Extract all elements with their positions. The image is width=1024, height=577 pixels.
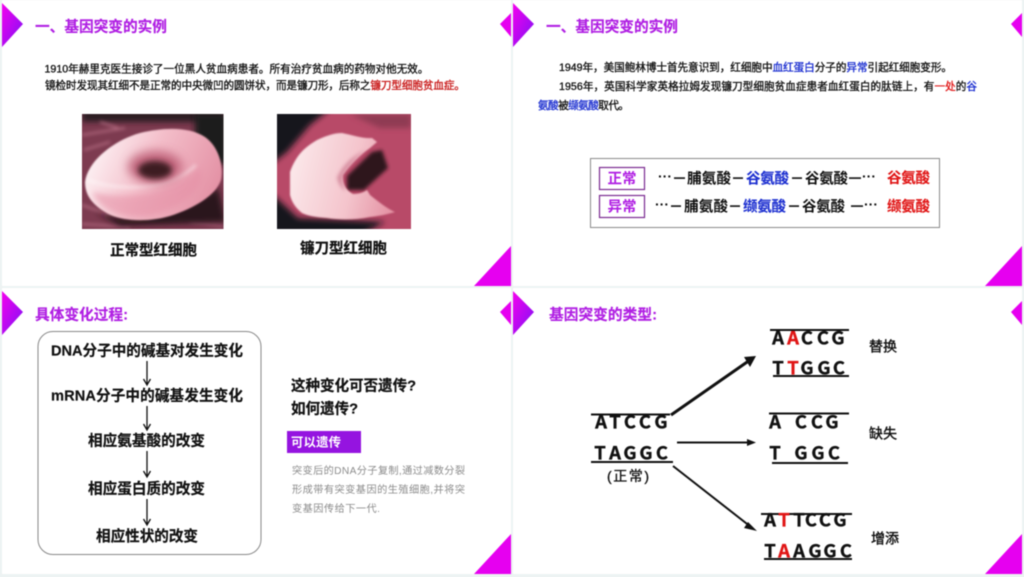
label: deletion: 缺失 xyxy=(869,425,897,441)
DNA: normal: A xyxy=(594,408,607,434)
arrow: to substitution xyxy=(671,356,756,415)
title: 一、基因突变的实例 xyxy=(546,18,678,36)
sequence: normal peptide: ··· xyxy=(862,168,876,184)
DNA: normal: G xyxy=(639,440,653,466)
DNA: normal: C xyxy=(639,408,651,434)
DNA: substitution: C xyxy=(817,324,829,350)
panel: slide 4, mutation types xyxy=(513,288,1022,574)
DNA: insertion: G xyxy=(833,506,847,532)
DNA: insertion: C xyxy=(805,506,817,532)
icon: right diamond half xyxy=(500,13,511,37)
text block: history: 1956年，英国科学家英格拉姆发现镰刀型细胞贫血症患者血红蛋白的肽链上，有一处的谷 xyxy=(559,80,977,93)
DNA: insertion: A xyxy=(792,538,805,564)
question text: 如何遗传? xyxy=(291,400,358,418)
panel: slide 2, molecular cause xyxy=(513,0,1022,286)
question text: 这种变化可否遗传? xyxy=(291,376,416,394)
text block: case description xyxy=(44,62,465,92)
step 4: 相应蛋白质的改变 xyxy=(88,480,205,498)
icon: right diamond half xyxy=(1011,301,1022,325)
DNA: insertion: G xyxy=(808,538,822,564)
label: sickle cell: 镰刀型红细胞 xyxy=(300,239,387,257)
sequence: abnormal peptide: 缬氨酸 xyxy=(743,198,786,216)
icon: corner triangle xyxy=(474,534,511,574)
sequence: normal peptide xyxy=(658,168,930,188)
DNA: substitution: A xyxy=(771,324,784,350)
label: normal cell: 正常型红细胞 xyxy=(110,241,197,259)
label box: normal: 正常 xyxy=(608,170,636,188)
DNA: deletion: A xyxy=(768,408,781,434)
text block: case description: 1910年赫里克医生接诊了一位黑人贫血病患者。所有治疗贫血病的药物对他无效。 xyxy=(44,62,428,76)
DNA: normal: T xyxy=(609,408,621,434)
arrow xyxy=(144,451,150,477)
arrow: to deletion xyxy=(677,439,756,446)
text block: explanation xyxy=(292,464,465,515)
answer tag: 可以遗传 xyxy=(291,435,341,450)
arrow xyxy=(144,499,150,525)
sequence: abnormal peptide: ··· xyxy=(655,196,669,212)
text block: explanation: 突变后的DNA分子复制,通过减数分裂 xyxy=(292,464,465,477)
arrow xyxy=(144,361,150,385)
sequence: normal peptide: 谷氨酸 xyxy=(887,169,930,187)
DNA: insertion: T xyxy=(764,538,776,564)
icon: left triangle xyxy=(513,3,534,47)
text block: history xyxy=(538,61,977,112)
DNA: deletion: T xyxy=(769,440,781,466)
label box: abnormal xyxy=(600,196,644,218)
icon: left triangle xyxy=(513,291,534,335)
DNA: insertion: C xyxy=(840,538,852,564)
DNA: deletion xyxy=(768,408,849,466)
DNA: normal: G xyxy=(623,440,637,466)
text block: explanation: 形成带有突变基因的生殖细胞,并将突 xyxy=(292,483,465,496)
DNA: substitution xyxy=(770,324,849,380)
DNA: insertion: T xyxy=(793,506,805,532)
DNA: deletion: C xyxy=(811,408,823,434)
DNA: substitution: G xyxy=(831,324,845,350)
label: substitution: 替换 xyxy=(869,338,897,354)
DNA: insertion: A xyxy=(763,506,776,532)
DNA: normal xyxy=(591,408,673,484)
step 5: 相应性状的改变 xyxy=(96,527,198,545)
sequence: abnormal peptide: 缬氨酸 xyxy=(887,198,930,216)
label: insertion: 增添 xyxy=(871,530,899,546)
DNA: deletion: C xyxy=(795,408,807,434)
icon: corner triangle xyxy=(985,246,1022,286)
text block: case description: 镜检时发现其红细不是正常的中央微凹的圆饼状，而是镰刀形，后称之镰刀型细胞贫血症。 xyxy=(45,79,465,92)
DNA: insertion: G xyxy=(823,538,837,564)
DNA: substitution: G xyxy=(817,354,831,380)
icon: left triangle xyxy=(2,3,23,47)
sequence: abnormal peptide: 脯氨酸 xyxy=(684,198,728,216)
icon: corner triangle xyxy=(985,534,1022,574)
title: 一、基因突变的实例 xyxy=(35,18,167,36)
arrow: to insertion xyxy=(673,466,757,531)
step 3: 相应氨基酸的改变 xyxy=(88,432,205,450)
sequence: abnormal peptide: ··· xyxy=(864,196,878,212)
sequence: abnormal peptide: 谷氨酸 xyxy=(802,198,846,216)
panel: slide 1, sickle cell example xyxy=(2,0,511,286)
DNA: normal: A xyxy=(608,440,621,466)
icon: corner triangle xyxy=(474,246,511,286)
DNA: substitution: G xyxy=(800,354,814,380)
DNA: substitution: T xyxy=(787,354,799,380)
DNA: deletion: G xyxy=(794,440,808,466)
DNA: deletion: C xyxy=(828,440,840,466)
text block: explanation: 变基因传给下一代. xyxy=(292,502,380,515)
DNA: insertion: T xyxy=(778,506,790,532)
DNA: substitution: A xyxy=(786,324,799,350)
sequence: normal peptide: 脯氨酸 xyxy=(687,170,732,188)
sequence: abnormal peptide xyxy=(655,196,930,216)
panel: slide 3, change process xyxy=(2,288,511,574)
arrow xyxy=(144,406,150,430)
icon: right diamond half xyxy=(500,301,511,325)
label box: abnormal: 异常 xyxy=(608,198,636,216)
sequence: normal peptide: ··· xyxy=(658,168,672,184)
step 2: mRNA分子中的碱基发生变化 xyxy=(51,386,243,404)
DNA: deletion: G xyxy=(811,440,825,466)
icon: left triangle xyxy=(2,291,23,335)
answer tag xyxy=(287,431,361,453)
title: 基因突变的类型: xyxy=(549,306,657,324)
illustration: normal red blood cell xyxy=(82,110,227,229)
title: 具体变化过程: xyxy=(35,306,128,324)
panel: flow chart xyxy=(38,332,261,554)
DNA: insertion: C xyxy=(819,506,831,532)
panel: amino acid comparison box xyxy=(590,158,940,228)
DNA: normal: C xyxy=(624,408,636,434)
DNA: insertion xyxy=(761,506,852,564)
DNA: normal: G xyxy=(654,408,668,434)
DNA: insertion: A xyxy=(777,538,790,564)
text block: history: 氨酸被缬氨酸取代。 xyxy=(538,99,629,112)
label box: normal xyxy=(600,168,644,190)
DNA: deletion: G xyxy=(825,408,839,434)
DNA: normal: T xyxy=(594,440,606,466)
icon: right diamond half xyxy=(1011,13,1022,37)
sequence: normal peptide: 谷氨酸 xyxy=(805,170,848,188)
illustration: sickle red blood cell xyxy=(276,113,412,230)
step 1: DNA分子中的碱基对发生变化 xyxy=(51,342,243,360)
text block: history: 1949年，美国鲍林博士首先意识到，红细胞中血红蛋白分子的异常引起红细胞变形。 xyxy=(559,61,952,74)
DNA: substitution: T xyxy=(772,354,784,380)
DNA: normal: C xyxy=(656,440,668,466)
DNA: substitution: C xyxy=(833,354,845,380)
question text xyxy=(291,376,416,418)
sequence: normal peptide: 谷氨酸 xyxy=(746,170,790,188)
DNA: normal: (正常) xyxy=(607,468,649,484)
DNA: substitution: C xyxy=(801,324,813,350)
